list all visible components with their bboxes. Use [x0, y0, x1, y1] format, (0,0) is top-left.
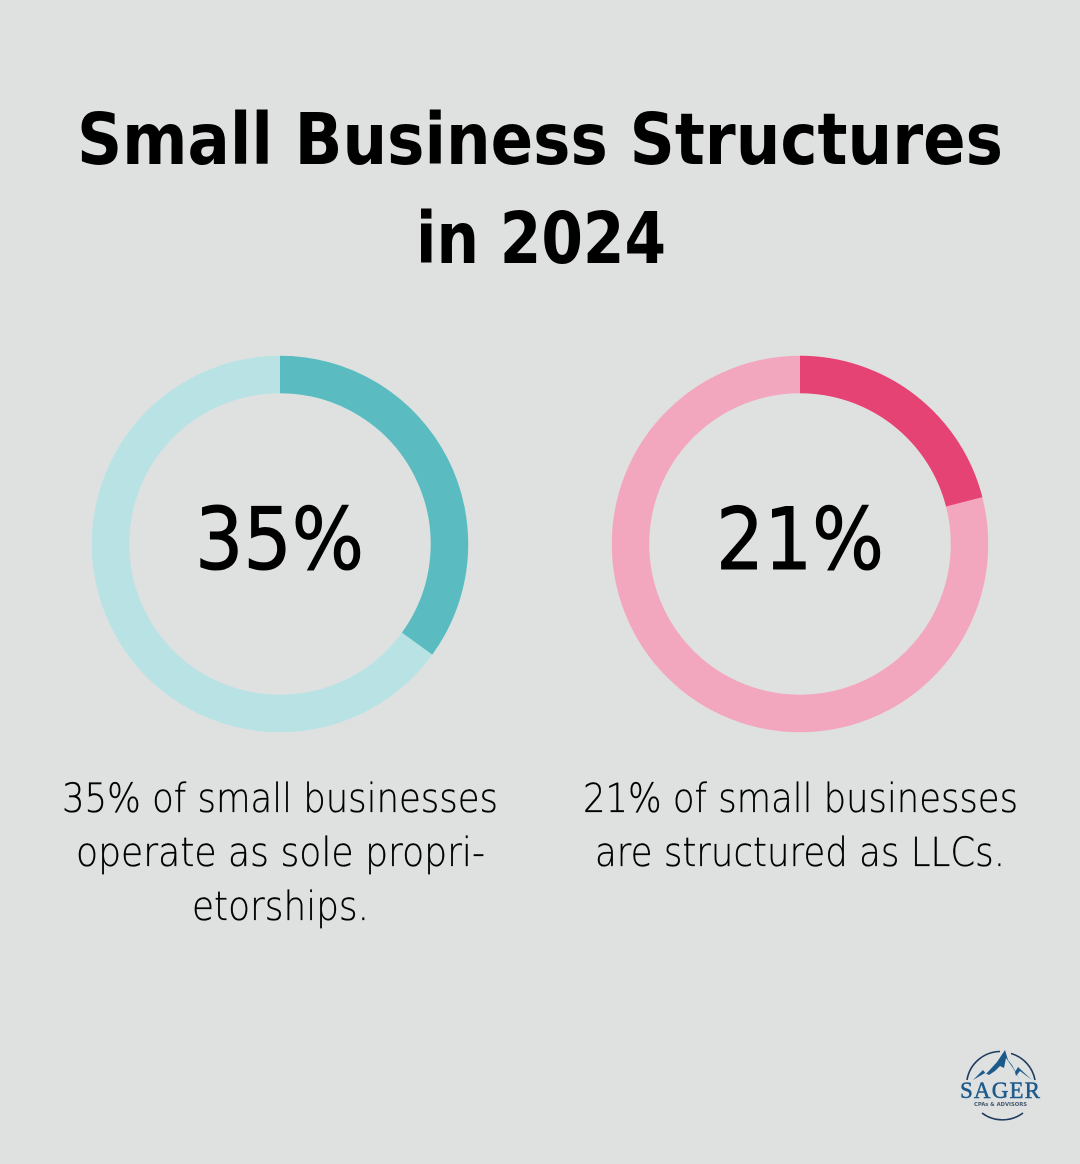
panel: sole proprietorships [62, 374, 498, 930]
description: LLCs: 21% of small businesses [583, 776, 1018, 822]
logo: Sager CPAs & Advisors [960, 1050, 1041, 1120]
description: LLCs [583, 776, 1018, 876]
description: sole proprietorships: 35% of small businesses [62, 776, 498, 822]
title: in 2024 [416, 197, 666, 280]
logo tagline: CPAs & ADVISORS [974, 1102, 1027, 1108]
panel: LLCs [583, 374, 1018, 876]
description: sole proprietorships [62, 776, 498, 930]
icon: logo ring [967, 1052, 1035, 1120]
title [77, 98, 1003, 280]
value: 21%: 21% [716, 490, 884, 590]
value: 35%: 35% [195, 490, 364, 590]
description: sole proprietorships: operate as sole propri- [76, 830, 485, 876]
description: LLCs: are structured as LLCs. [595, 830, 1005, 876]
description: sole proprietorships: etorships. [192, 884, 369, 930]
donut chart: 21% [630, 374, 970, 714]
icon: mountain [973, 1050, 1032, 1080]
logo wordmark: SAGER [960, 1078, 1041, 1103]
donut chart: 35% [110, 374, 450, 714]
